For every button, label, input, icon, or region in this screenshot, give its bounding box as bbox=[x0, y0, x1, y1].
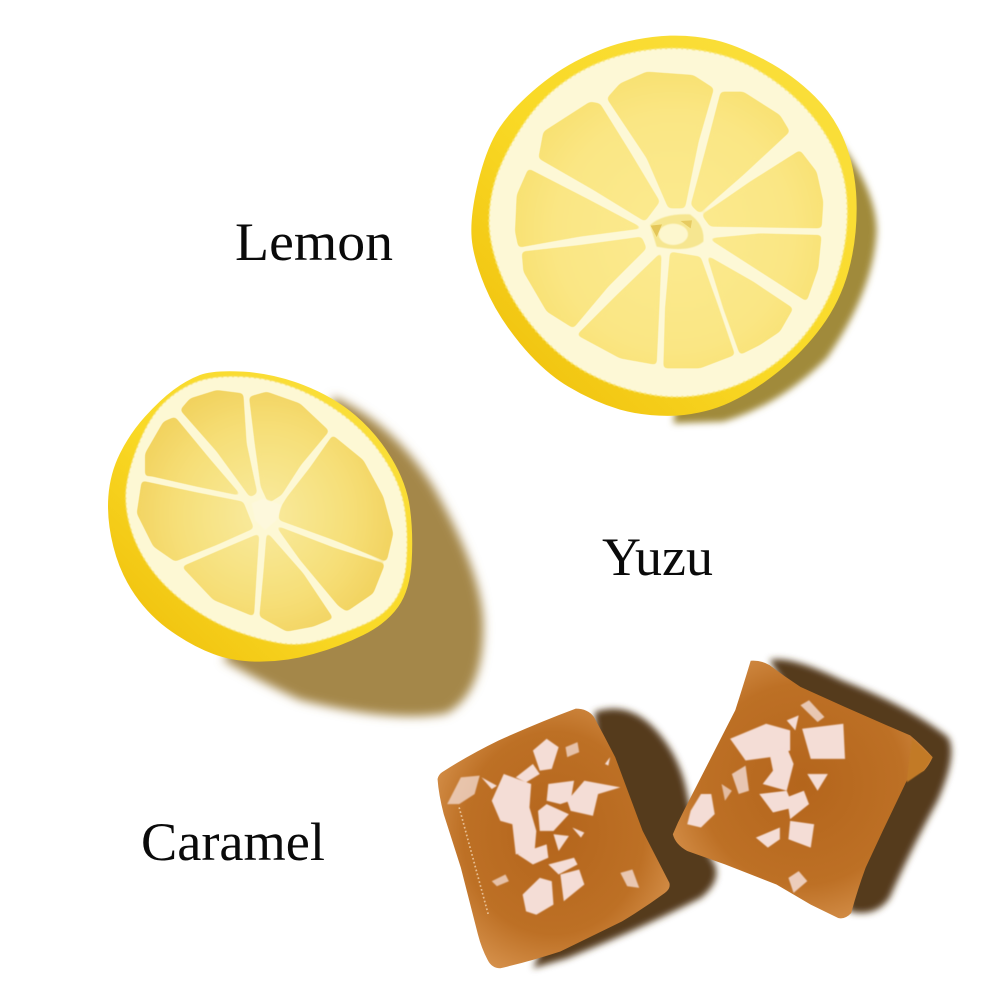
lemon slice shadow bbox=[673, 125, 877, 423]
lemon slice pith bbox=[489, 48, 847, 397]
yuzu core bbox=[252, 498, 282, 530]
lemon slice core bbox=[650, 214, 703, 249]
yuzu rind bbox=[108, 371, 412, 662]
right caramel body bbox=[673, 661, 932, 918]
right caramel shadow bbox=[770, 659, 951, 913]
left caramel highlight bbox=[459, 807, 488, 915]
yuzu segments bbox=[137, 390, 393, 632]
lemon slice bbox=[471, 36, 877, 423]
left caramel salt flakes bbox=[447, 739, 639, 915]
right caramel bbox=[673, 661, 932, 918]
label: Lemon: Lemon bbox=[235, 212, 393, 272]
halved yuzu bbox=[108, 371, 483, 716]
lemon slice rind bbox=[471, 36, 857, 416]
yuzu pith bbox=[126, 376, 407, 645]
yuzu shadow bbox=[223, 397, 483, 716]
right caramel salt flakes bbox=[687, 700, 845, 893]
caramels bbox=[438, 659, 951, 968]
left caramel bbox=[438, 709, 670, 968]
label: Yuzu: Yuzu bbox=[602, 527, 713, 587]
right caramel fold bbox=[907, 739, 932, 782]
lemon slice segments bbox=[515, 72, 823, 368]
left caramel shadow bbox=[533, 709, 716, 968]
label: Caramel: Caramel bbox=[141, 812, 325, 872]
left caramel body bbox=[438, 709, 670, 968]
